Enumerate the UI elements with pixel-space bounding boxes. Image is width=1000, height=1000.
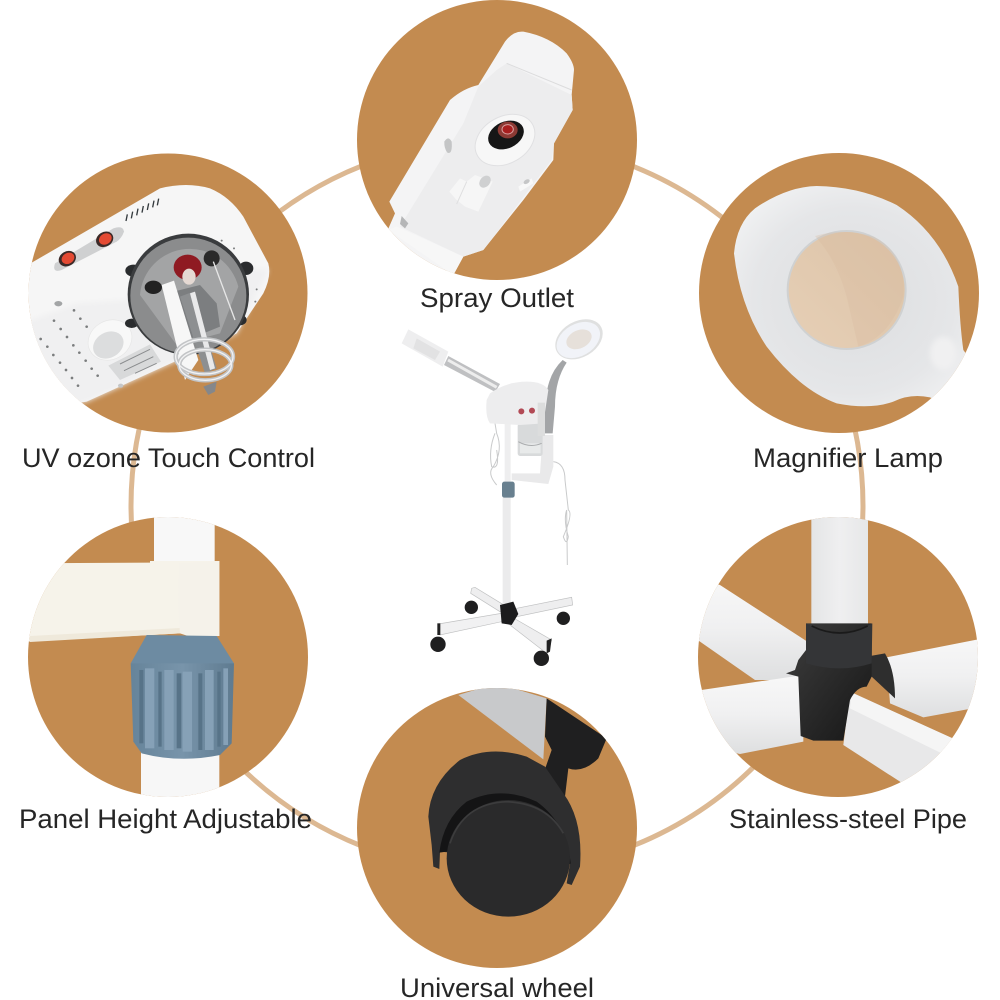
icon: red switches bbox=[54, 227, 124, 271]
icon: vent slots bbox=[126, 199, 159, 221]
label: magnifier lamp: Magnifier Lamp bbox=[753, 443, 943, 473]
icon: base tubes bbox=[699, 584, 978, 782]
icon: nozzle bbox=[474, 114, 536, 166]
icon: wheel hood bbox=[428, 752, 580, 885]
icon: vertical pole bbox=[811, 517, 868, 624]
icon: heating coil bbox=[162, 281, 233, 395]
icon: water port bbox=[88, 320, 132, 360]
panel: magnifier lamp bbox=[699, 153, 979, 433]
icon: casters bbox=[430, 601, 570, 666]
panel: universal wheel bbox=[357, 683, 637, 968]
icon: side slot bbox=[449, 173, 493, 212]
icon: base bbox=[437, 587, 573, 653]
label: stainless-steel pipe: Stainless-steel Pipe bbox=[729, 804, 967, 834]
icon: height arm bbox=[10, 561, 219, 643]
icon: black connector bbox=[786, 623, 895, 741]
icon: magnifier ring bbox=[548, 311, 610, 368]
label: panel height adjustable: Panel Height Adjustable bbox=[19, 804, 312, 834]
icon: cords bbox=[491, 423, 570, 565]
icon: magnifier lens bbox=[787, 230, 907, 350]
icon: lower pole bbox=[141, 752, 220, 797]
icon: main body bbox=[486, 382, 548, 436]
icon: pole bbox=[503, 497, 511, 607]
icon: lamp dish bbox=[734, 186, 973, 406]
label: spray outlet: Spray Outlet bbox=[420, 283, 575, 313]
product photo: facial steamer bbox=[402, 311, 610, 666]
panel: stainless-steel pipe bbox=[698, 517, 978, 797]
icon: caster stem bbox=[540, 698, 607, 797]
icon: blue adjustment knob bbox=[131, 635, 234, 759]
panel: spray outlet bbox=[357, 0, 637, 280]
icon: upper pole bbox=[154, 517, 215, 561]
panel: UV ozone touch control bbox=[13, 154, 307, 432]
icon: spray head body bbox=[383, 32, 574, 275]
connecting ring bbox=[131, 140, 863, 872]
icon: U bracket bbox=[512, 435, 553, 484]
panel: panel height adjustable bbox=[28, 517, 308, 797]
icon: rating label bbox=[108, 344, 161, 380]
icon: steam chamber bbox=[125, 234, 253, 355]
icon: steam arm bbox=[402, 329, 500, 392]
icon: caster arm bbox=[458, 683, 547, 759]
label: UV ozone touch control: UV ozone Touch Control bbox=[22, 443, 315, 473]
icon: dotted holes bbox=[39, 239, 258, 388]
icon: flexible neck bbox=[543, 360, 567, 433]
icon: wheel bbox=[447, 800, 570, 917]
icon: water jar bbox=[518, 423, 543, 456]
icon: machine body bbox=[13, 185, 269, 407]
icon: height knob bbox=[502, 482, 515, 498]
